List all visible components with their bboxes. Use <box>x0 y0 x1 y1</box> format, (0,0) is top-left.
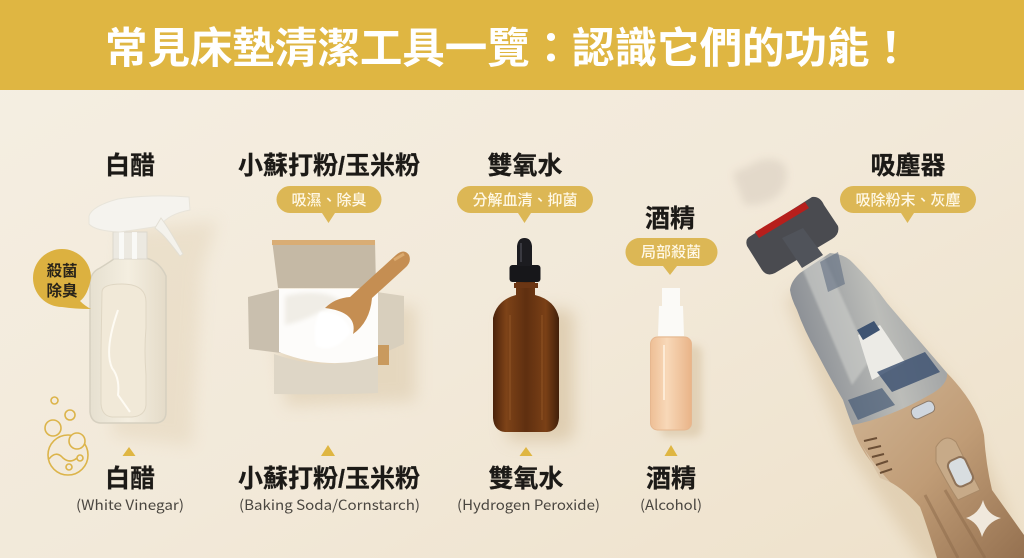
shadow: amber bottle <box>506 309 574 441</box>
vents <box>864 438 892 473</box>
central tube <box>802 255 870 385</box>
label: baking soda: 小蘇打粉/玉米粉 <box>238 465 420 493</box>
label: hydrogen peroxide: 雙氧水 <box>488 465 564 493</box>
item: alcohol <box>626 205 718 515</box>
marker triangle <box>122 447 136 456</box>
button panel <box>936 438 980 500</box>
icon: bubbles <box>45 397 88 475</box>
dust filter <box>858 325 905 380</box>
item: vacuum <box>734 152 1024 558</box>
sparkle mark <box>966 500 1001 537</box>
pill: local disinfection: 局部殺菌 <box>641 244 701 261</box>
marker triangle <box>520 447 532 456</box>
callout: kills germs <box>33 249 91 309</box>
nozzle tube <box>782 228 823 268</box>
pill: local disinfection <box>626 238 718 275</box>
handle groove <box>925 490 985 558</box>
shadow: vacuum <box>786 263 1020 558</box>
english: alcohol: (Alcohol) <box>640 495 702 515</box>
title banner <box>0 0 1024 90</box>
shadow: box <box>271 306 416 406</box>
item: baking soda <box>238 152 420 515</box>
english: hydrogen peroxide: (Hydrogen Peroxide) <box>457 495 600 515</box>
label: white vinegar: 白醋 <box>105 465 155 493</box>
label: alcohol: 酒精 <box>646 465 696 493</box>
pill: removes powder and dust: 吸除粉末、灰塵 <box>855 191 961 209</box>
transparent canister <box>790 253 947 425</box>
heading: white vinegar: 白醋 <box>105 152 155 180</box>
callout: kills germs: 除臭 <box>46 281 78 300</box>
powder pile <box>734 159 787 205</box>
icon: handheld vacuum <box>746 197 1024 558</box>
pill: breaks down serum <box>457 186 593 223</box>
upper bracket <box>820 252 845 292</box>
heading: baking soda: 小蘇打粉/玉米粉 <box>238 152 420 180</box>
english: baking soda: (Baking Soda/Cornstarch) <box>239 495 420 515</box>
pill: removes powder and dust <box>840 186 976 223</box>
item: white vinegar <box>33 152 217 515</box>
pill: breaks down serum: 分解血清、抑菌 <box>472 192 578 209</box>
marker triangle <box>664 445 678 456</box>
marker triangle <box>321 445 335 456</box>
heading: hydrogen peroxide: 雙氧水 <box>487 152 563 180</box>
title: 常見床墊清潔工具一覽：認識它們的功能！ <box>105 26 912 73</box>
icon: glass spray bottle <box>89 196 190 423</box>
icon: amber dropper bottle <box>493 238 559 432</box>
icon: alcohol spray bottle <box>650 288 692 430</box>
release button <box>910 399 936 421</box>
callout: kills germs: 殺菌 <box>46 261 78 280</box>
shadow: spray bottle <box>112 221 217 446</box>
heading: alcohol: 酒精 <box>645 205 695 233</box>
pill: absorbs moisture <box>276 186 382 223</box>
shadow: alcohol bottle <box>660 345 702 437</box>
pill: absorbs moisture: 吸濕、除臭 <box>291 191 367 209</box>
nozzle head <box>746 197 838 274</box>
heading: vacuum: 吸塵器 <box>870 152 946 180</box>
english: white vinegar: (White Vinegar) <box>76 495 184 515</box>
icon: open box with powder and spoon <box>248 240 410 394</box>
item: hydrogen peroxide <box>457 152 600 515</box>
vacuum body <box>852 373 1024 558</box>
